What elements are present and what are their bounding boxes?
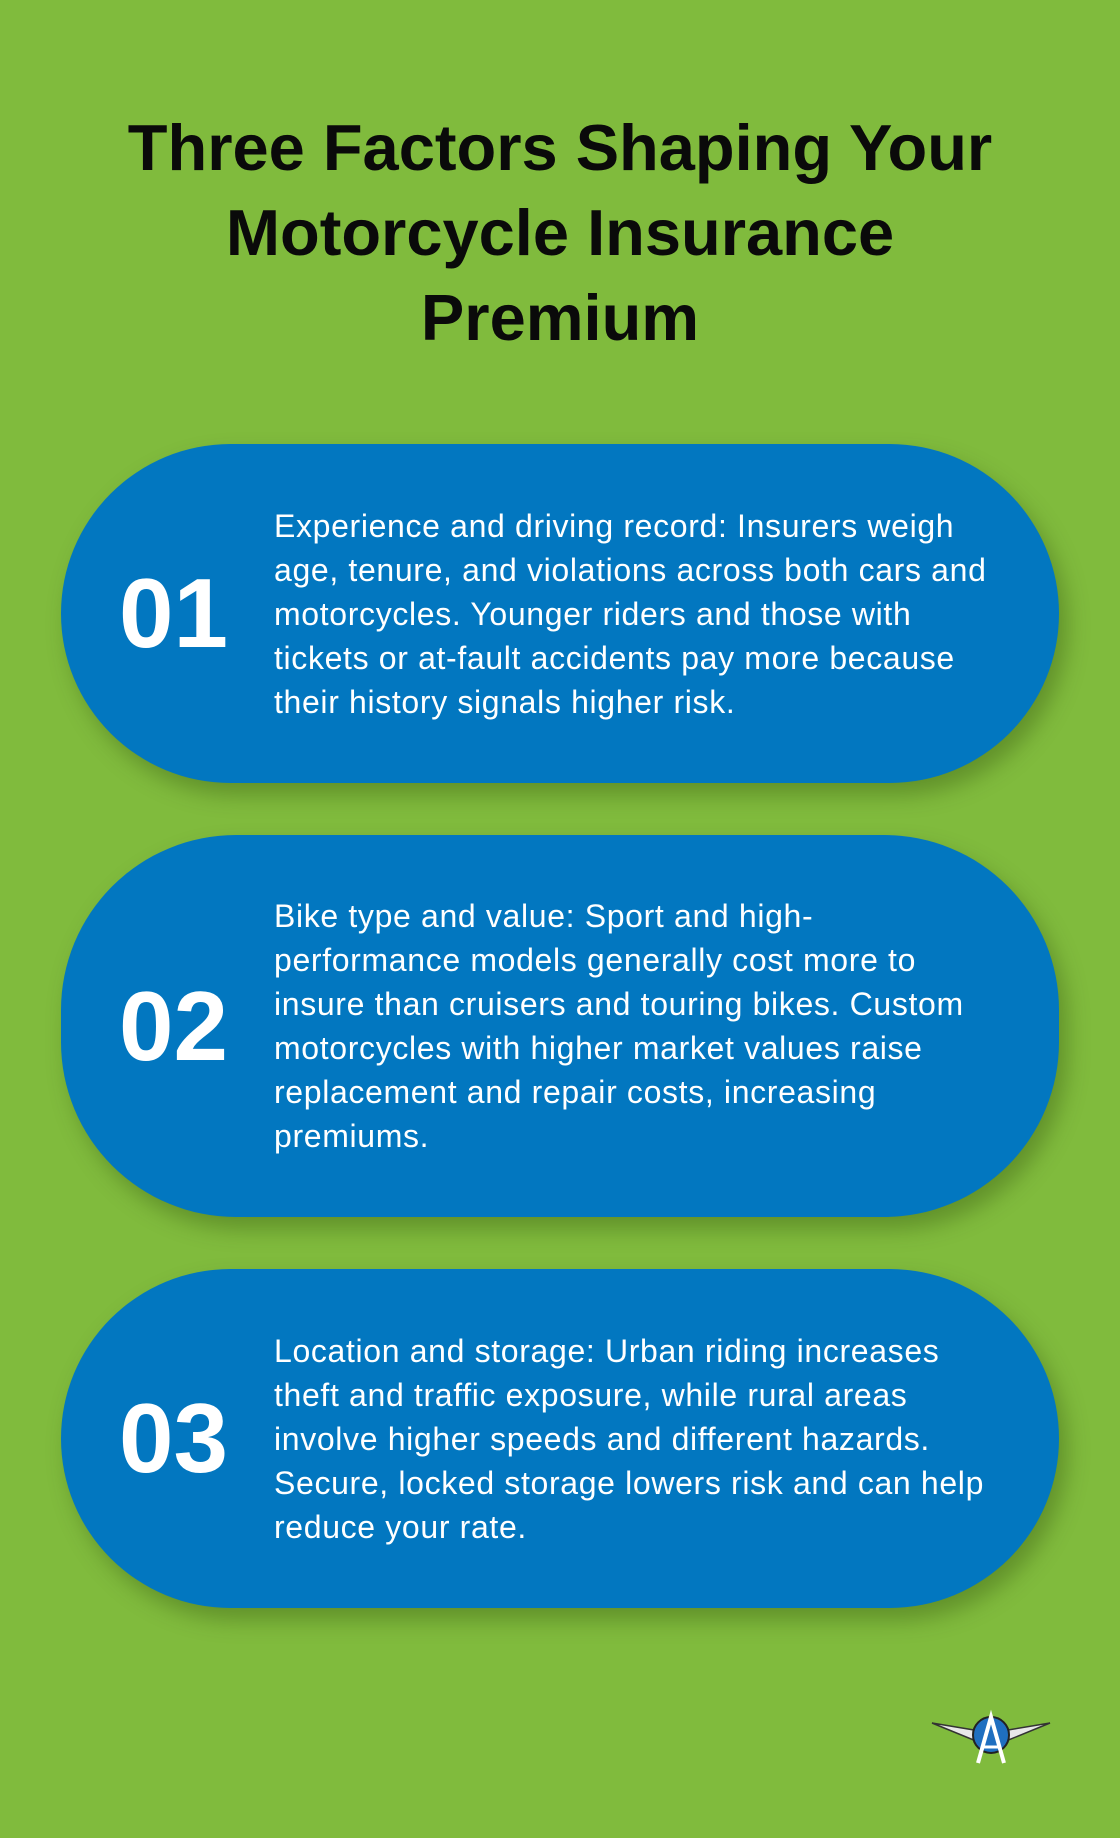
text: factor 1: Experience and driving record: Insurers weigh bbox=[274, 508, 954, 544]
text: factor 2: insure than cruisers and touring bikes. Custom bbox=[274, 986, 964, 1022]
number 02: 02 bbox=[119, 970, 228, 1080]
title: Three Factors Shaping Your bbox=[128, 111, 992, 184]
title: Premium bbox=[421, 281, 699, 354]
text: factor 1 bbox=[274, 508, 987, 720]
icon: logo bbox=[932, 1710, 1050, 1764]
text: factor 3: involve higher speeds and different hazards. bbox=[274, 1420, 930, 1456]
title bbox=[128, 111, 992, 354]
text: factor 3: Location and storage: Urban riding increases bbox=[274, 1332, 939, 1368]
text: factor 3 bbox=[274, 1332, 984, 1544]
text: factor 2: premiums. bbox=[274, 1118, 429, 1154]
title: Motorcycle Insurance bbox=[226, 196, 894, 269]
text: factor 1: their history signals higher risk. bbox=[274, 684, 735, 720]
text: factor 3: theft and traffic exposure, while rural areas bbox=[274, 1376, 907, 1412]
panel: factor 2 bbox=[61, 835, 1059, 1217]
text: factor 1: age, tenure, and violations across both cars and bbox=[274, 552, 987, 588]
number 03: 03 bbox=[119, 1383, 228, 1493]
number 01: 01 bbox=[119, 558, 228, 668]
panel: factor 3 bbox=[61, 1269, 1059, 1608]
panel: factor 1 bbox=[61, 444, 1059, 783]
text: factor 2 bbox=[274, 898, 964, 1154]
text: factor 3: reduce your rate. bbox=[274, 1508, 527, 1544]
text: factor 2: performance models generally cost more to bbox=[274, 942, 916, 978]
text: factor 3: Secure, locked storage lowers risk and can help bbox=[274, 1464, 984, 1500]
text: factor 2: motorcycles with higher market values raise bbox=[274, 1030, 923, 1066]
text: factor 1: motorcycles. Younger riders and those with bbox=[274, 596, 911, 632]
text: factor 2: replacement and repair costs, increasing bbox=[274, 1074, 876, 1110]
text: factor 1: tickets or at-fault accidents pay more because bbox=[274, 640, 955, 676]
text: factor 2: Bike type and value: Sport and high- bbox=[274, 898, 813, 934]
